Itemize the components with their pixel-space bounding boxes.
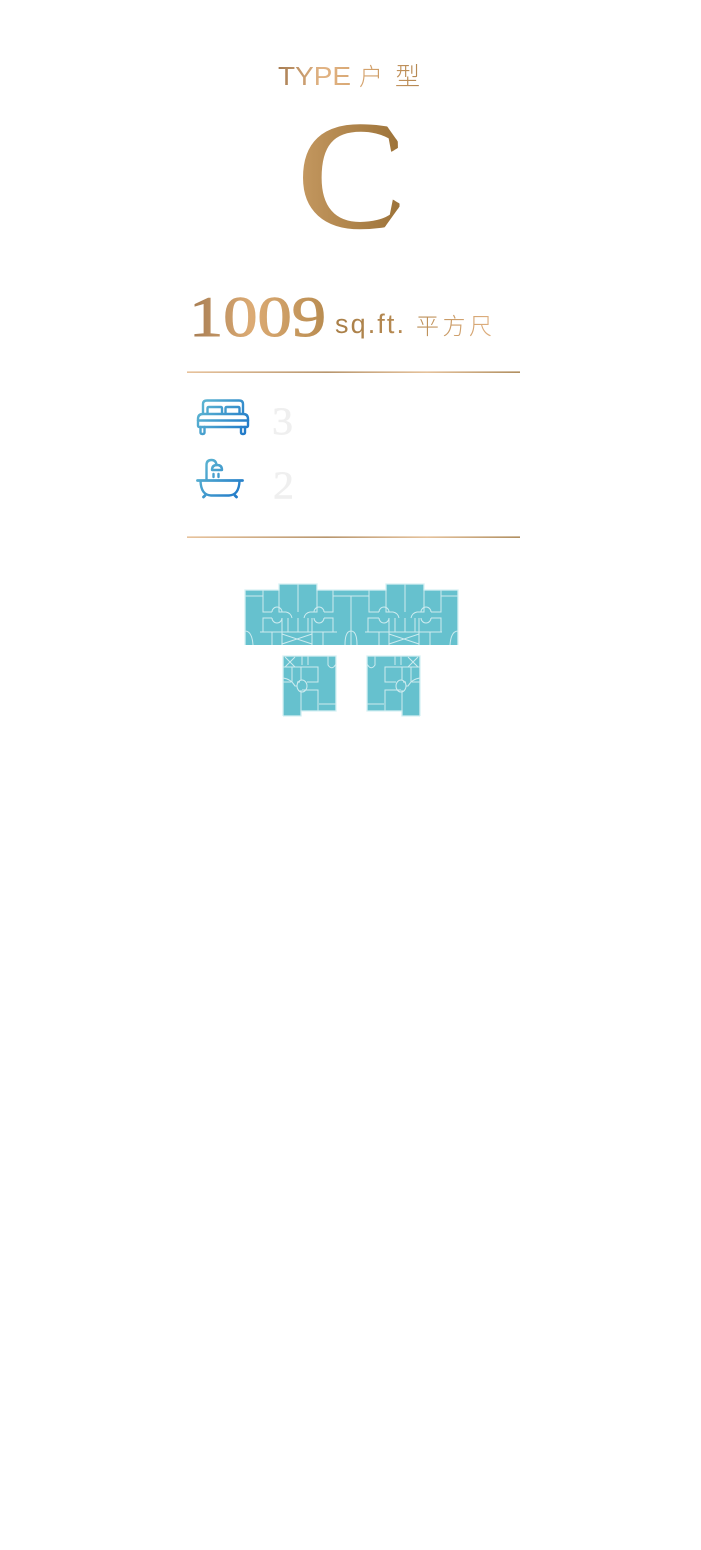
area: 1009 sq.ft. 平方尺: 平 <box>416 313 439 339</box>
bedroom count: 3 <box>272 400 293 443</box>
infographic canvas <box>187 64 520 717</box>
heading: TYPE 户型: 型 <box>395 63 420 91</box>
bathroom count: 2 <box>273 464 294 507</box>
floor plan: key plan <box>245 584 458 716</box>
type letter C: C <box>297 91 408 261</box>
lower right unit <box>367 656 420 716</box>
upper block of units <box>245 584 458 645</box>
area: 1009 sq.ft. 平方尺: 方 <box>442 313 466 339</box>
area: 1009 sq.ft. 平方尺: 1009 <box>189 286 326 349</box>
icon: bathtub <box>198 460 242 497</box>
area: 1009 sq.ft. 平方尺 <box>189 286 492 349</box>
area: 1009 sq.ft. 平方尺: 尺 <box>469 313 492 339</box>
lower left unit <box>283 656 336 716</box>
heading: TYPE 户型 <box>278 61 420 91</box>
area: 1009 sq.ft. 平方尺: sq.ft. <box>335 309 404 339</box>
heading: TYPE 户型: 户 <box>359 64 383 91</box>
icon: bed <box>198 400 248 434</box>
heading: TYPE 户型: TYPE <box>278 61 351 91</box>
